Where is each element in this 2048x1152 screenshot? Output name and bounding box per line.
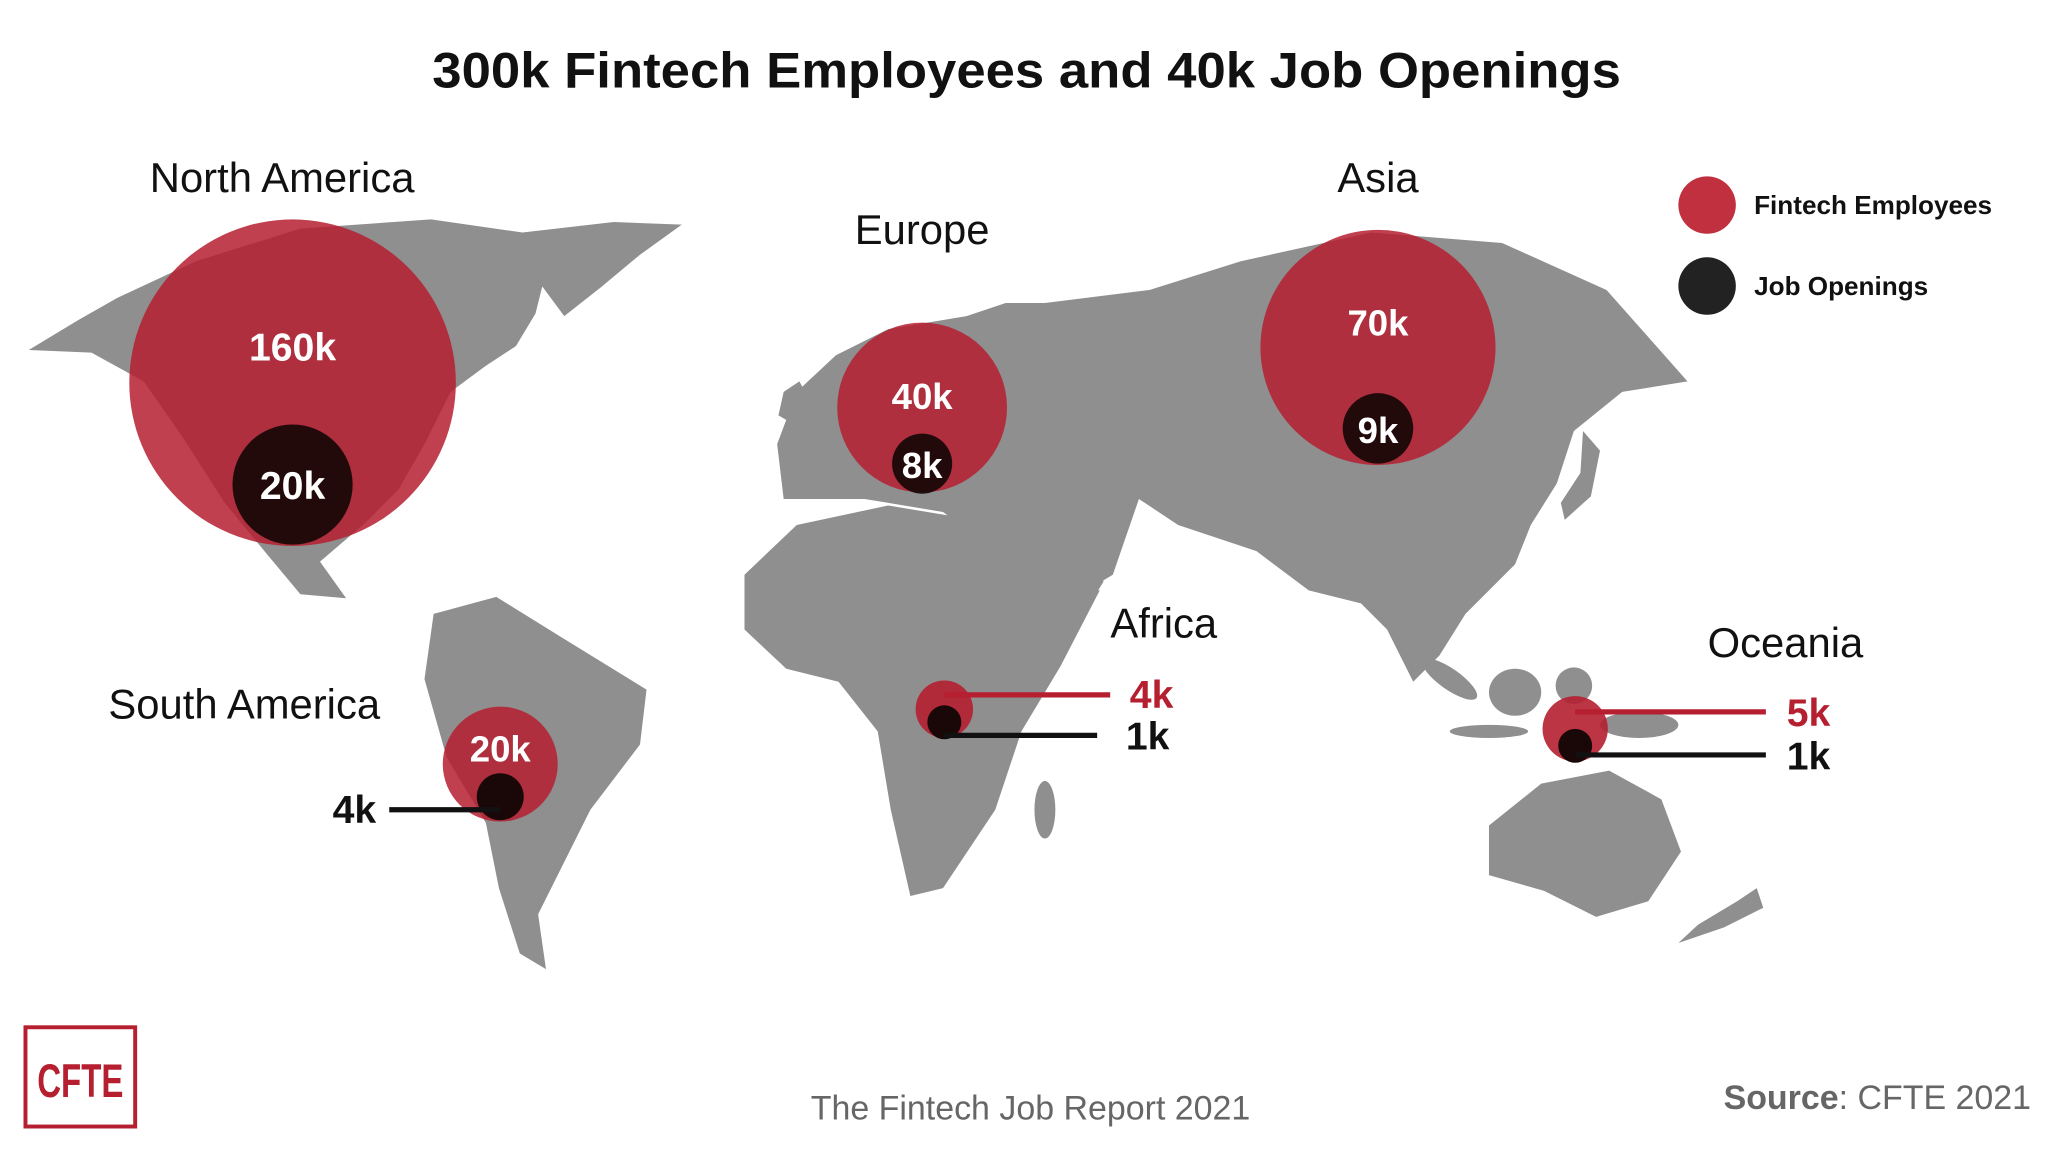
bubbles: North America: 20k <box>260 465 325 508</box>
footer: report name: The Fintech Job Report 2021 <box>811 1089 1250 1127</box>
label: Asia: Asia <box>1337 154 1419 201</box>
bubbles: Africa: 4k <box>1130 674 1174 717</box>
bubbles: Asia: 70k <box>1347 303 1409 344</box>
bubbles: Oceania: 5k <box>1787 692 1831 735</box>
bubbles: Oceania <box>1543 692 1831 778</box>
bubbles: South America <box>333 707 558 832</box>
logo: CFTE <box>25 1027 135 1127</box>
world map <box>29 219 1763 969</box>
bubbles: Africa <box>916 674 1174 759</box>
label: North America: North America <box>150 154 415 201</box>
UK <box>778 381 812 424</box>
bubbles: Asia: 9k <box>1358 410 1399 451</box>
Africa <box>744 505 1100 896</box>
label: Oceania: Oceania <box>1708 619 1864 666</box>
bubbles: Europe: 40k <box>892 376 953 417</box>
legend: Job Openings <box>1754 271 1928 301</box>
bubbles: Europe: 8k <box>902 445 943 486</box>
footer: source: Source: CFTE 2021 <box>1724 1079 2031 1117</box>
Indonesia <box>1417 652 1483 706</box>
New Zealand <box>1678 888 1763 943</box>
logo: CFTE: CFTE <box>37 1054 123 1107</box>
bubbles: North America: 160k <box>249 326 336 369</box>
label: Africa: Africa <box>1110 599 1218 646</box>
bubbles: South America: 20k <box>470 728 531 769</box>
label: South America: South America <box>108 680 381 727</box>
bubbles: Asia <box>1260 230 1496 465</box>
bubbles: Europe <box>837 323 1007 494</box>
Madagascar <box>1034 781 1055 839</box>
bubbles: South America: 4k <box>333 789 376 832</box>
label: Europe: Europe <box>855 206 989 253</box>
bubbles: Africa: 1k <box>1126 716 1170 759</box>
Japan <box>1561 431 1600 520</box>
bubbles: North America <box>129 219 456 546</box>
legend: Fintech Employees <box>1754 190 1992 220</box>
bubbles: Oceania: 1k <box>1787 735 1831 778</box>
Europe and Asia <box>777 232 1688 682</box>
legend <box>1678 176 1992 315</box>
Australia <box>1489 771 1681 917</box>
North America <box>29 219 549 598</box>
Arabia <box>993 546 1104 624</box>
South America <box>424 597 647 969</box>
title: 300k Fintech Employees and 40k Job Openings <box>432 43 1621 99</box>
Greenland <box>522 222 682 316</box>
